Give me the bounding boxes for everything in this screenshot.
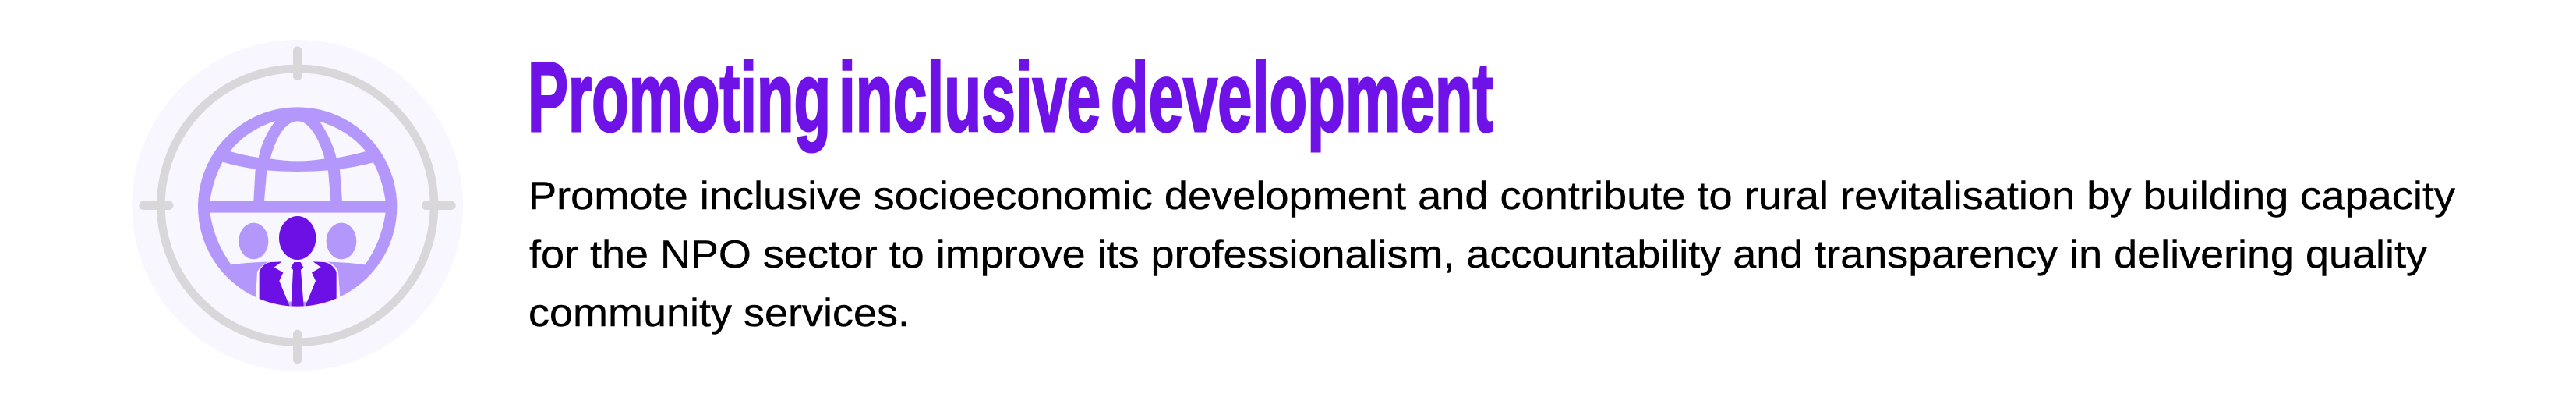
body text: community services.	[528, 291, 910, 335]
icon: globe with people inside target ring	[132, 40, 463, 371]
body text	[528, 174, 2455, 335]
target ring with tick marks	[143, 51, 451, 360]
body text: for the NPO sector to improve its professionalism, accountability and transparency in delivering quality	[529, 232, 2427, 276]
globe	[198, 107, 397, 307]
side people heads	[239, 223, 356, 259]
central person in suit	[256, 216, 341, 310]
infographic canvas	[133, 40, 2455, 371]
heading: Promoting	[528, 42, 831, 152]
icon background disc	[132, 40, 463, 371]
body text: Promote inclusive socioeconomic development and contribute to rural revitalisation by building capacity	[528, 174, 2455, 218]
heading	[528, 42, 1493, 152]
heading: development	[1111, 42, 1493, 152]
heading: inclusive	[839, 42, 1101, 152]
